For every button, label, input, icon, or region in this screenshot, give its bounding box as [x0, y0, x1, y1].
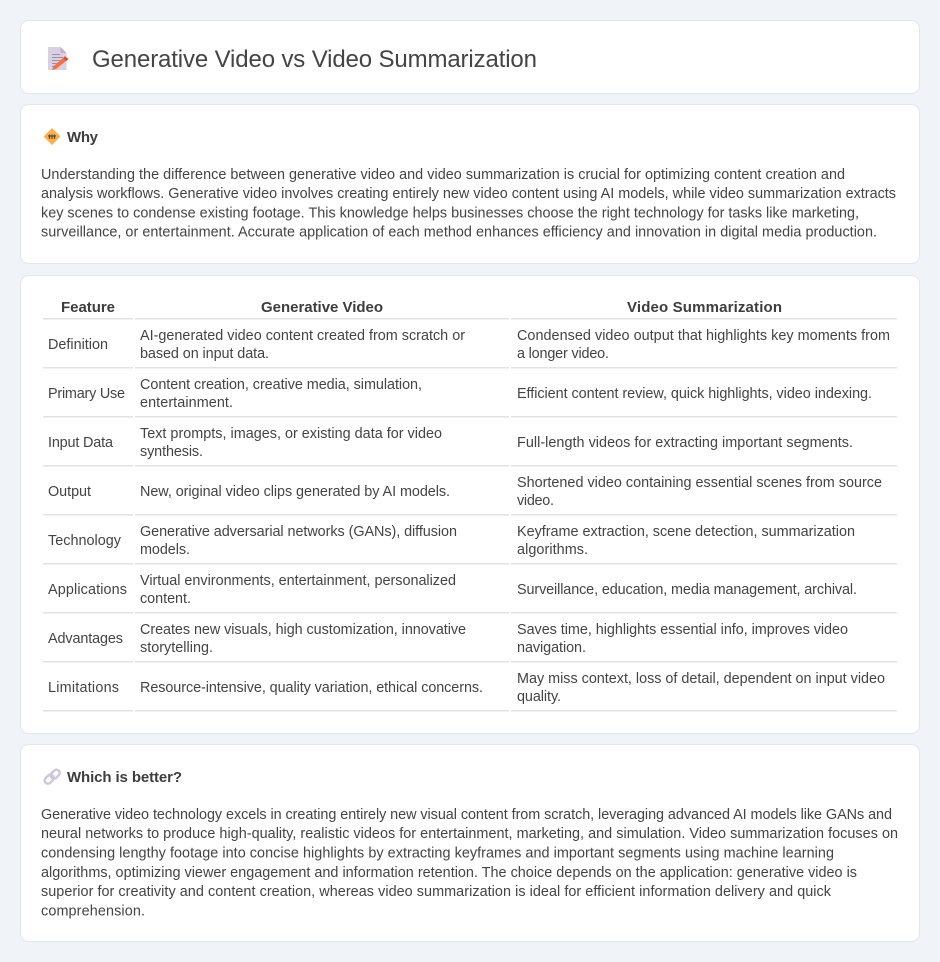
text block: which is better paragraph: comprehension.: [41, 904, 145, 920]
table row: advantages: Advantages: [48, 631, 123, 647]
table row: primary use: Primary Use: [48, 386, 125, 402]
table row: applications: Surveillance, education, media management, archival.: [517, 582, 857, 598]
table row: input data: [43, 426, 897, 466]
text block: why paragraph: surveillance, or entertainment. Accurate application of each method enhances efficiency and innovation in digital media production.: [41, 224, 877, 240]
text block: which is better paragraph: condensing lengthy footage into concise highlights by extracting keyframes and important segments using machine learning: [41, 846, 834, 862]
text block: why paragraph: key scenes to condense existing footage. This knowledge helps businesses choose the right technology for tasks like marketing,: [41, 206, 859, 222]
table row: technology: Technology: [48, 533, 122, 549]
text block: why paragraph: analysis workflows. Generative video involves creating entirely new video content using AI models, while video summarization extracts: [41, 186, 896, 202]
table row: output: video.: [517, 493, 554, 509]
table row: limitations: Limitations: [48, 680, 119, 696]
table row: limitations: [43, 671, 897, 712]
table row: primary use: Content creation, creative media, simulation,: [140, 377, 422, 393]
table row: definition: a longer video.: [517, 346, 609, 362]
table row: input data: Text prompts, images, or existing data for video: [140, 426, 442, 442]
panel: title header: [20, 20, 920, 94]
table row: output: Output: [48, 484, 91, 500]
icon: chain link: [43, 768, 61, 785]
table header row: Video Summarization: [627, 299, 782, 316]
heading: which is better: Which is better?: [67, 769, 182, 786]
table row: definition: Definition: [48, 337, 108, 353]
icon: warning diamond: [44, 128, 60, 145]
table row: definition: AI-generated video content created from scratch or: [140, 328, 465, 344]
table row: applications: content.: [140, 591, 191, 607]
text block: which is better paragraph: Generative video technology excels in creating entirely new visual content from scratch, leveraging advanced AI models like GANs and: [41, 807, 892, 823]
table header row: Feature: [61, 299, 115, 316]
table row: output: [43, 475, 897, 516]
table row: advantages: storytelling.: [140, 640, 213, 656]
panel: why: [20, 104, 920, 264]
table row: advantages: Creates new visuals, high customization, innovative: [140, 622, 466, 638]
text block: which is better paragraph: superior for creativity and content creation, whereas video summarization is ideal for efficient information delivery and quick: [41, 884, 832, 900]
table row: input data: Full-length videos for extracting important segments.: [517, 435, 853, 451]
table row: advantages: navigation.: [517, 640, 586, 656]
table header row: [43, 299, 897, 320]
table row: limitations: quality.: [517, 689, 561, 705]
text block: which is better paragraph: algorithms, optimizing viewer engagement and information retention. The choice depends on the application: generative video is: [41, 865, 857, 881]
icon: memo with pencil: [48, 47, 68, 70]
title: Generative Video vs Video Summarization: [92, 46, 537, 73]
table row: applications: Applications: [48, 582, 127, 598]
text block: why paragraph: Understanding the difference between generative video and video summarization is crucial for optimizing content creation and: [41, 167, 845, 183]
panel: which is better: [20, 744, 920, 942]
table row: advantages: [43, 622, 897, 662]
table row: primary use: entertainment.: [140, 395, 233, 411]
table row: limitations: May miss context, loss of detail, dependent on input video: [517, 671, 885, 687]
table row: limitations: Resource-intensive, quality variation, ethical concerns.: [140, 680, 483, 696]
table row: applications: Virtual environments, entertainment, personalized: [140, 573, 456, 589]
table row: input data: synthesis.: [140, 444, 203, 460]
table row: technology: models.: [140, 542, 190, 558]
table row: definition: Condensed video output that highlights key moments from: [517, 328, 890, 344]
panel: comparison table: [20, 276, 920, 734]
table row: technology: Keyframe extraction, scene detection, summarization: [517, 524, 855, 540]
table row: technology: [43, 524, 897, 564]
text block: why paragraph: [41, 167, 896, 240]
table row: primary use: [43, 377, 897, 418]
table row: technology: Generative adversarial networks (GANs), diffusion: [140, 524, 457, 540]
table row: input data: Input Data: [48, 435, 113, 451]
table row: definition: [43, 328, 897, 368]
table row: advantages: Saves time, highlights essential info, improves video: [517, 622, 848, 638]
table row: definition: based on input data.: [140, 346, 269, 362]
table row: technology: algorithms.: [517, 542, 588, 558]
text block: which is better paragraph: [41, 807, 898, 920]
table row: output: New, original video clips generated by AI models.: [140, 484, 450, 500]
table row: applications: [43, 573, 897, 614]
table row: primary use: Efficient content review, quick highlights, video indexing.: [517, 386, 872, 402]
heading: why: Why: [67, 129, 99, 146]
table row: output: Shortened video containing essential scenes from source: [517, 475, 882, 491]
table header row: Generative Video: [261, 299, 383, 316]
text block: which is better paragraph: neural networks to produce high-quality, realistic videos for entertainment, marketing, and simulation. Video summarization focuses on: [41, 826, 898, 842]
